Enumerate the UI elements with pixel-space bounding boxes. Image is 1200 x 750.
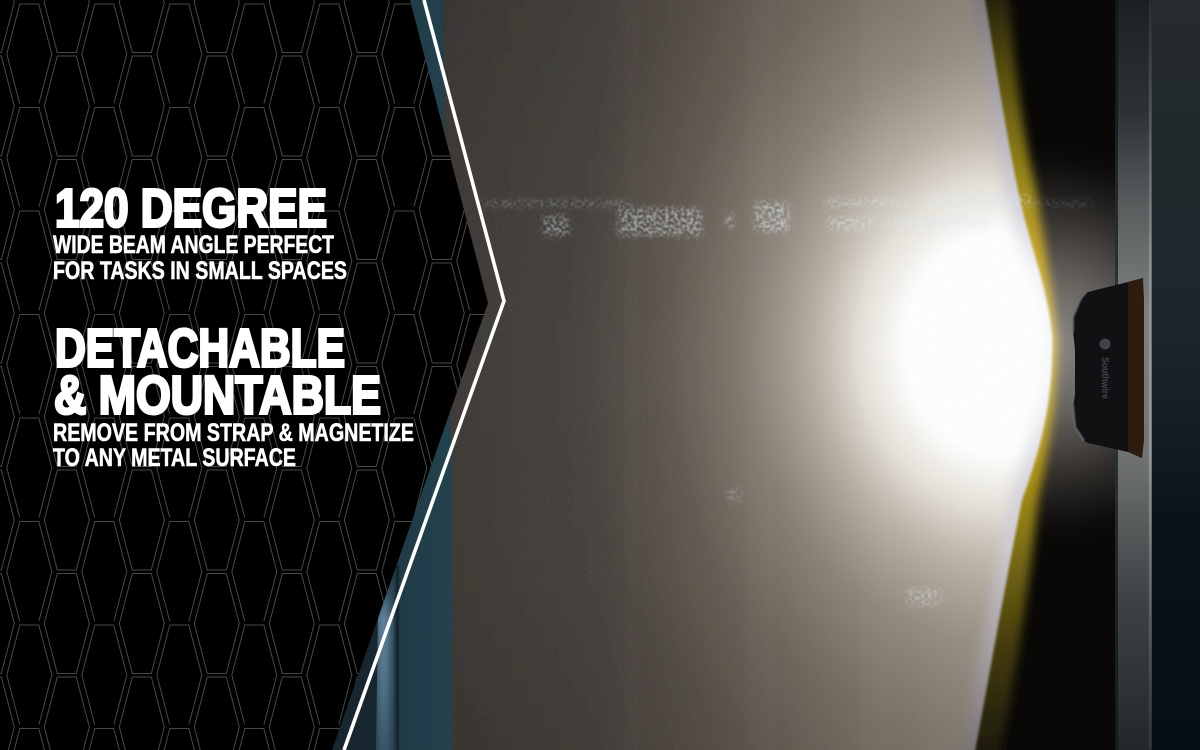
white beam core (1019, 238, 1053, 445)
heading: 120 DEGREE (55, 180, 327, 238)
heading (54, 320, 381, 426)
white chevron line (344, 0, 504, 750)
logo mark (1100, 338, 1110, 350)
dim halo right of the beam (990, 130, 1115, 560)
mounted work light (1073, 278, 1144, 458)
heading: DETACHABLE (55, 320, 345, 378)
description: WIDE BEAM ANGLE PERFECT (53, 231, 334, 259)
lilac beam edge (973, 0, 1052, 750)
metal rail (1115, 0, 1200, 750)
background photo: flashlight beam on cardboard wall (332, 0, 1200, 750)
honeycomb pattern (0, 0, 520, 750)
feature block: detachable and mountable (53, 320, 414, 472)
description (53, 231, 347, 285)
feature block: 120 degree (53, 180, 347, 285)
lit cardboard wall (440, 0, 1070, 750)
black angled panel (0, 0, 488, 750)
brand name: Southwire (1099, 357, 1110, 399)
cardboard grain and corrugation (444, 0, 900, 750)
description: TO ANY METAL SURFACE (53, 444, 296, 472)
description (53, 419, 414, 472)
description: FOR TASKS IN SMALL SPACES (53, 257, 347, 285)
heading: & MOUNTABLE (54, 366, 381, 426)
white streaks on cardboard (482, 196, 1092, 606)
yellow beam fringe (960, 0, 1056, 750)
description: REMOVE FROM STRAP & MAGNETIZE (53, 419, 414, 447)
teal door frame strip (330, 0, 454, 750)
